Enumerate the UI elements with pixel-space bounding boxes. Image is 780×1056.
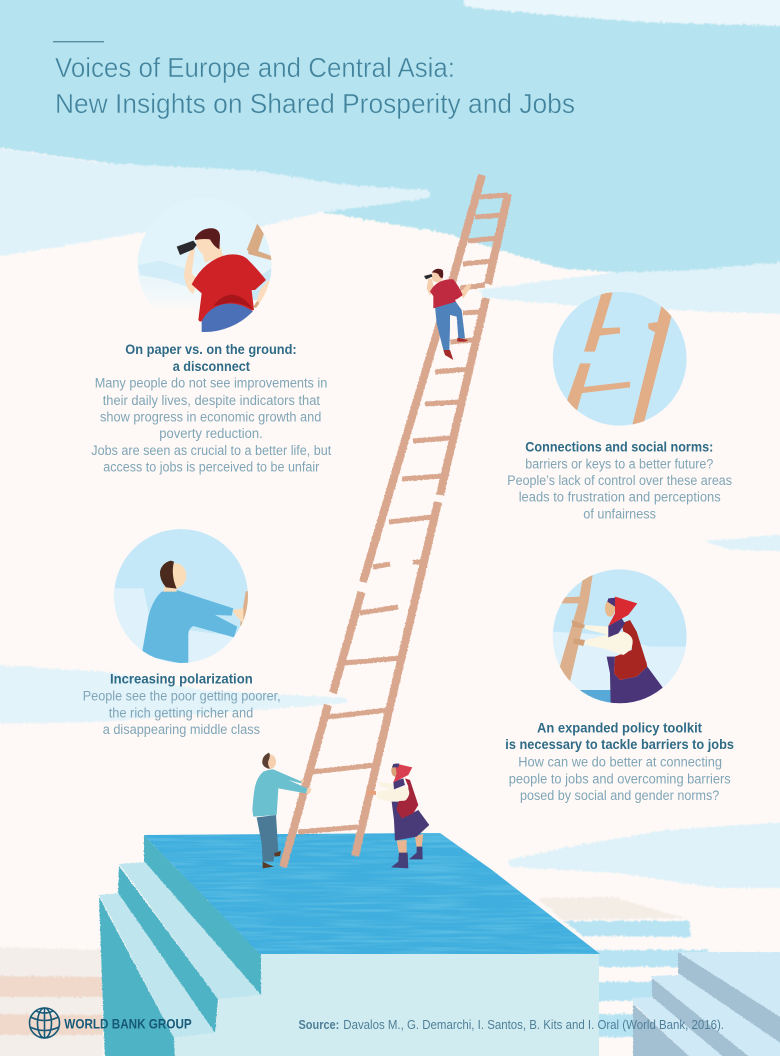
body text: the rich getting richer and <box>109 705 253 720</box>
lower stair riser <box>99 897 175 1056</box>
heading: Increasing polarization <box>110 671 253 686</box>
body text: People’s lack of control over these areas <box>507 473 732 488</box>
title <box>55 52 575 119</box>
body text: People see the poor getting poorer, <box>83 689 281 704</box>
heading: Connections and social norms: <box>525 440 713 455</box>
body text: show progress in economic growth and <box>100 410 321 425</box>
main ladder <box>283 175 508 867</box>
platform top surface <box>144 833 600 954</box>
heading <box>125 342 297 374</box>
panel: connections and social norms <box>507 292 732 521</box>
platform side wall <box>144 835 261 995</box>
body text <box>509 755 731 803</box>
panel: expanded policy toolkit <box>505 569 734 803</box>
body text: poverty reduction. <box>159 426 263 441</box>
circle illustration: broken ladder <box>553 292 687 426</box>
platform front wall <box>174 954 599 1056</box>
bottom woman holding ladder <box>366 763 429 868</box>
circle illustration: man from behind <box>112 529 253 667</box>
body text: access to jobs is perceived to be unfair <box>103 460 320 475</box>
heading: An expanded policy toolkit <box>537 720 702 735</box>
body text: of unfairness <box>583 506 656 521</box>
heading: a disconnect <box>173 359 250 374</box>
platform and left stairs <box>99 833 600 1056</box>
icon: globe <box>30 1008 60 1038</box>
body text: barriers or keys to a better future? <box>525 456 713 471</box>
panel: on paper vs. on the ground <box>91 198 332 475</box>
World Bank Group logo <box>30 1008 192 1038</box>
body text: a disappearing middle class <box>103 722 260 737</box>
circle illustration: woman at ladder <box>552 569 690 707</box>
wordmark: WORLD BANK GROUP <box>64 1015 192 1031</box>
body text: leads to frustration and perceptions <box>519 490 721 505</box>
body text <box>83 689 281 737</box>
upper stair tread <box>119 862 261 999</box>
upper stair riser <box>118 866 218 1033</box>
lower stair tread <box>99 893 215 1038</box>
source note: Source: <box>298 1018 339 1032</box>
body text: posed by social and gender norms? <box>520 788 719 803</box>
title: Voices of Europe and Central Asia: <box>55 52 455 83</box>
climbing man with binoculars <box>424 269 472 360</box>
title: New Insights on Shared Prosperity and Jobs <box>55 88 575 119</box>
body text <box>91 376 332 475</box>
circle illustration: man with binoculars <box>138 224 272 332</box>
heading: On paper vs. on the ground: <box>125 342 297 357</box>
body text: people to jobs and overcoming barriers <box>509 771 731 786</box>
heading: is necessary to tackle barriers to jobs <box>505 737 734 752</box>
heading <box>505 720 734 752</box>
body text: Jobs are seen as crucial to a better life, but <box>91 443 332 458</box>
body text <box>507 456 732 521</box>
right stairs <box>632 952 780 1056</box>
body text: How can we do better at connecting <box>518 755 722 770</box>
body text: their daily lives, despite indicators that <box>103 393 320 408</box>
bottom man holding ladder <box>252 753 312 868</box>
source note: Davalos M., G. Demarchi, I. Santos, B. Kits and I. Oral (World Bank, 2016). <box>343 1018 724 1032</box>
title rule <box>53 41 104 42</box>
panel: increasing polarization <box>83 529 281 737</box>
body text: Many people do not see improvements in <box>95 376 327 391</box>
